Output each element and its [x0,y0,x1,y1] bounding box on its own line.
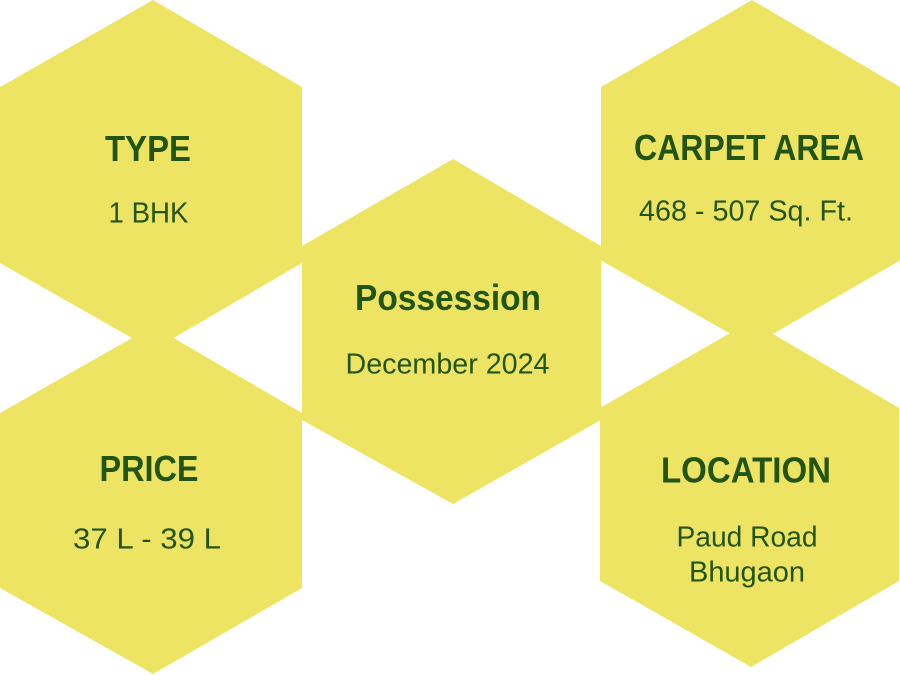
text: location value line 1: Paud Road [676,522,818,554]
panel: possession [302,159,601,504]
panel: type [0,0,302,350]
text: carpet area value: 468 - 507 Sq. Ft. [639,196,853,228]
heading: carpet area: CARPET AREA [634,127,864,168]
text: location value line 2: Bhugaon [689,556,805,588]
heading: price: PRICE [100,448,198,489]
text: type value: 1 BHK [108,198,189,230]
heading: possession: Possession [355,277,541,318]
text: possession value: December 2024 [346,348,550,380]
panel: location [600,321,899,667]
heading: type: TYPE [105,128,191,169]
panel: price [0,326,302,674]
heading: location: LOCATION [661,450,831,490]
panel: carpet area [601,0,900,346]
text: price value: 37 L - 39 L [73,524,221,556]
